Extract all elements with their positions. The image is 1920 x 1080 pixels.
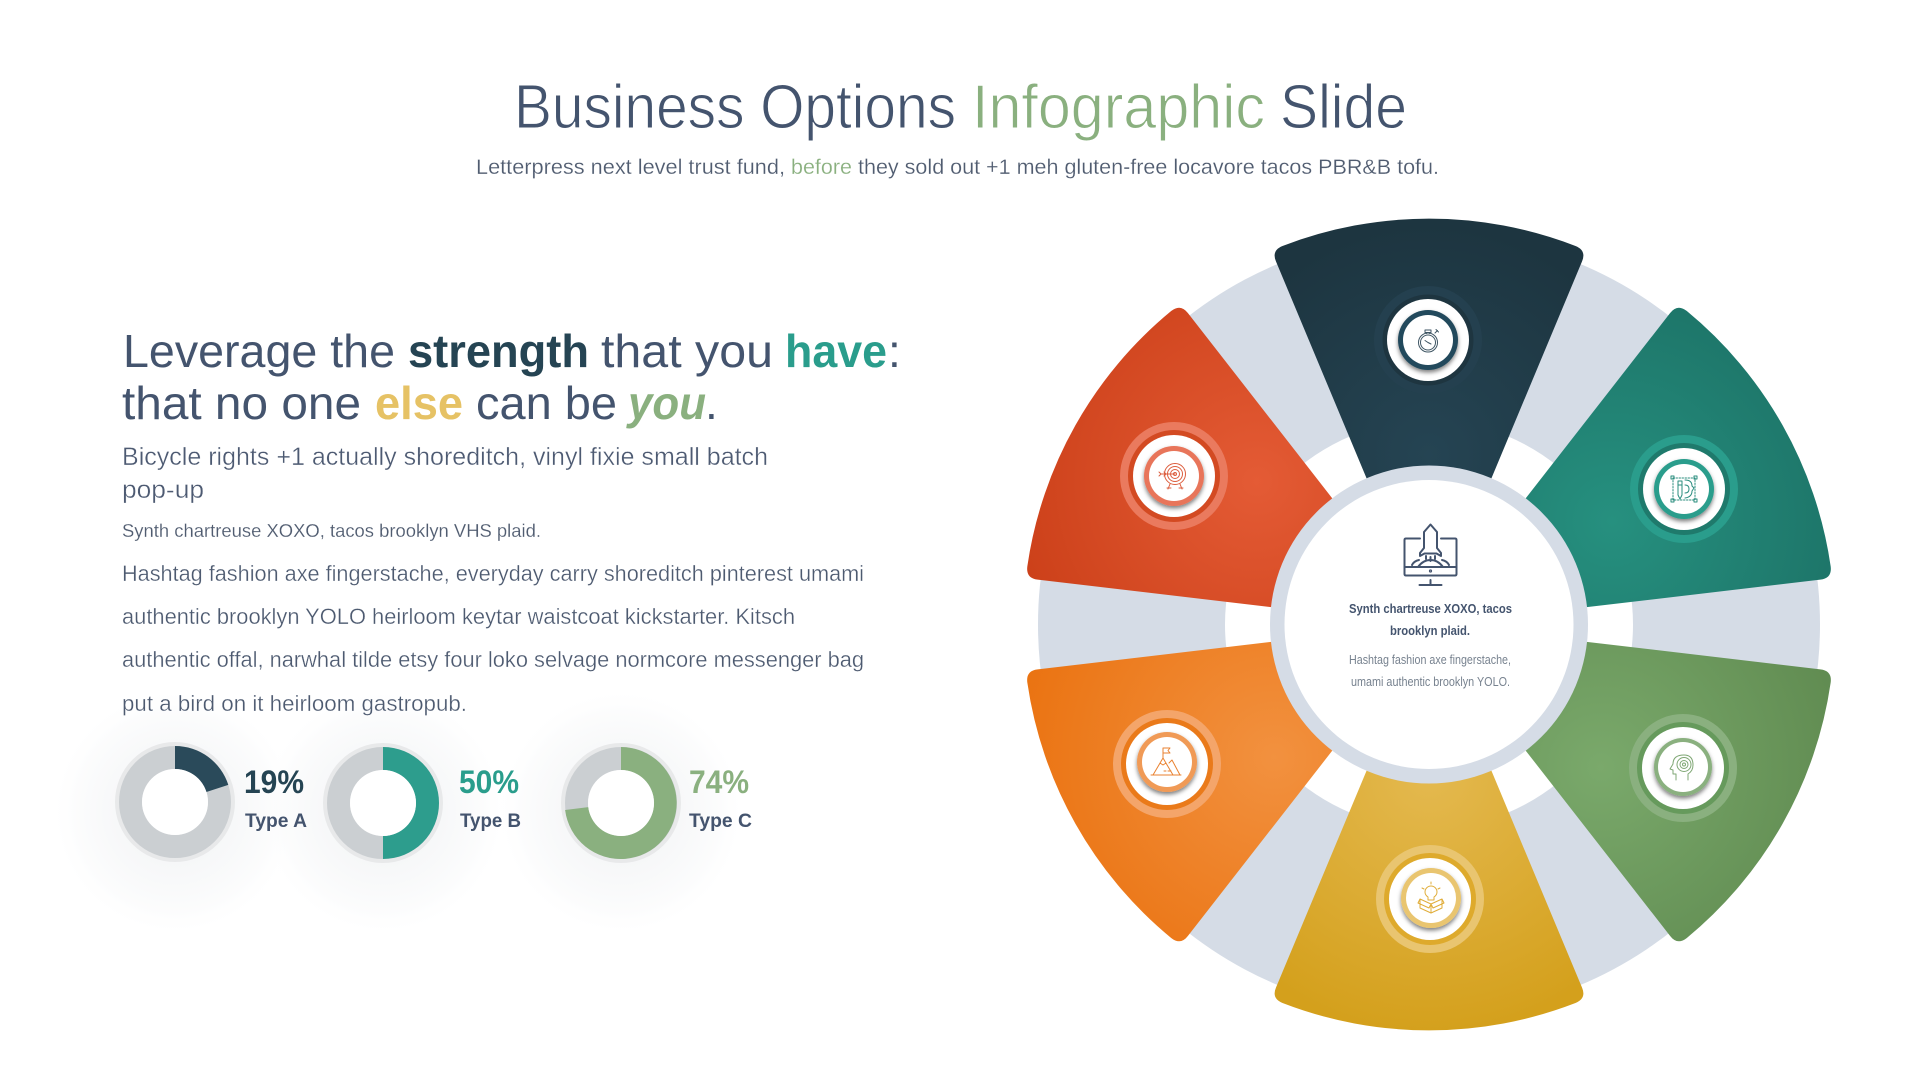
wedge: red <box>1000 291 1385 691</box>
donut chart: Type A 19% <box>115 742 307 862</box>
wedge: yellow <box>1275 762 1583 1030</box>
center text: Hashtag fashion axe fingerstache, <box>1349 653 1511 667</box>
donut chart: Type C 74%: Type C <box>689 811 752 832</box>
title: Slide <box>1280 73 1407 142</box>
body paragraph: authentic offal, narwhal tilde etsy four loko selvage normcore messenger bag <box>122 647 864 672</box>
center text: umami authentic brooklyn YOLO. <box>1351 675 1510 689</box>
body paragraph: authentic brooklyn YOLO heirloom keytar waistcoat kickstarter. Kitsch <box>122 604 795 629</box>
subheading: pop-up <box>122 476 204 504</box>
body paragraph: put a bird on it heirloom gastropub. <box>122 691 467 716</box>
heading: . <box>705 377 718 429</box>
icon badge: target <box>1120 422 1228 530</box>
subtitle <box>476 155 1439 179</box>
background ring <box>1038 234 1820 1016</box>
wedge: navy <box>1275 219 1583 486</box>
donut chart: Type C 74% <box>561 743 752 863</box>
heading: else <box>375 377 463 429</box>
donut chart: Type B 50%: Type B <box>460 811 521 832</box>
donut chart: Type A 19%: 19% <box>244 764 304 800</box>
title: Infographic <box>972 73 1265 142</box>
heading: Leverage the <box>123 325 395 377</box>
donut chart: Type C 74%: 74% <box>689 764 749 800</box>
donut chart: Type B 50%: 50% <box>459 764 519 800</box>
body paragraph <box>122 561 864 716</box>
title <box>514 73 1407 142</box>
icon badge: design pencil and gear <box>1630 435 1738 543</box>
subtitle: they sold out +1 meh gluten-free locavore tacos PBR&B tofu. <box>858 155 1439 179</box>
heading: you <box>626 377 706 429</box>
center disc <box>1270 466 1588 784</box>
title: Business Options <box>514 73 956 142</box>
center text: brooklyn plaid. <box>1390 624 1470 638</box>
heading: have <box>785 325 887 377</box>
icon: rocket launching from monitor <box>1404 524 1456 585</box>
wedge: orange <box>1000 558 1385 958</box>
wedge: green <box>1473 558 1858 958</box>
icon badge: mountain flag <box>1113 710 1221 818</box>
center text: Synth chartreuse XOXO, tacos <box>1349 602 1512 616</box>
icon badge: stopwatch <box>1374 286 1482 394</box>
options wheel <box>1000 219 1858 1030</box>
heading: that you <box>601 325 773 377</box>
heading: : <box>888 325 901 377</box>
heading <box>122 325 901 429</box>
subtitle: before <box>791 155 852 179</box>
icon badge: head with maze <box>1629 714 1737 822</box>
subheading: Bicycle rights +1 actually shoreditch, vinyl fixie small batch <box>122 443 768 471</box>
heading: strength <box>408 325 589 377</box>
tagline: Synth chartreuse XOXO, tacos brooklyn VHS plaid. <box>122 520 541 541</box>
center text <box>1349 602 1512 689</box>
heading: that no one <box>122 377 361 429</box>
donut chart: Type B 50% <box>323 743 521 863</box>
subtitle: Letterpress next level trust fund, <box>476 155 785 179</box>
body paragraph: Hashtag fashion axe fingerstache, everyday carry shoreditch pinterest umami <box>122 561 864 586</box>
wedge: teal <box>1473 291 1858 691</box>
subheading <box>122 443 768 504</box>
icon badge: idea box <box>1376 845 1484 953</box>
donut chart: Type A 19%: Type A <box>245 811 307 832</box>
heading: can be <box>476 377 617 429</box>
